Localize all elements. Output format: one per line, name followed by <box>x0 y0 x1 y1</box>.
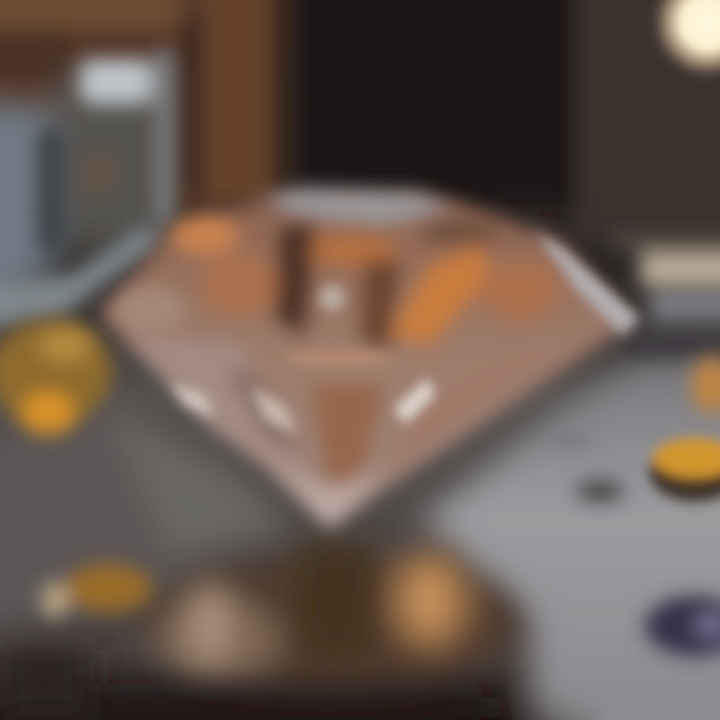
diamond lower pavilion facets <box>125 335 570 526</box>
amber blob lower left <box>41 564 152 618</box>
background: table base right <box>500 400 720 720</box>
amber stone right <box>649 438 720 502</box>
lamp glow top right <box>648 0 720 82</box>
background: dark centre <box>296 0 720 240</box>
diamond right girdle highlight <box>535 232 640 335</box>
background: wooden panel top left <box>0 0 295 210</box>
table surface right and bottom <box>0 350 720 715</box>
purple stone <box>645 596 720 656</box>
small objects on the right of the table <box>546 357 720 656</box>
dark pebble <box>546 432 624 502</box>
reflection below diamond <box>140 545 520 695</box>
bottom dark edge <box>0 650 490 720</box>
amber stone upper right <box>692 357 720 413</box>
amber stone left <box>0 320 112 434</box>
diamond <box>100 188 640 526</box>
diamond table edge (top grey facet) <box>262 188 455 226</box>
diamond body <box>100 200 630 526</box>
light shelf at right edge <box>610 232 720 356</box>
glass at left <box>0 50 173 340</box>
diamond upper facets <box>114 215 560 350</box>
diamond centre sparkle <box>285 285 395 365</box>
